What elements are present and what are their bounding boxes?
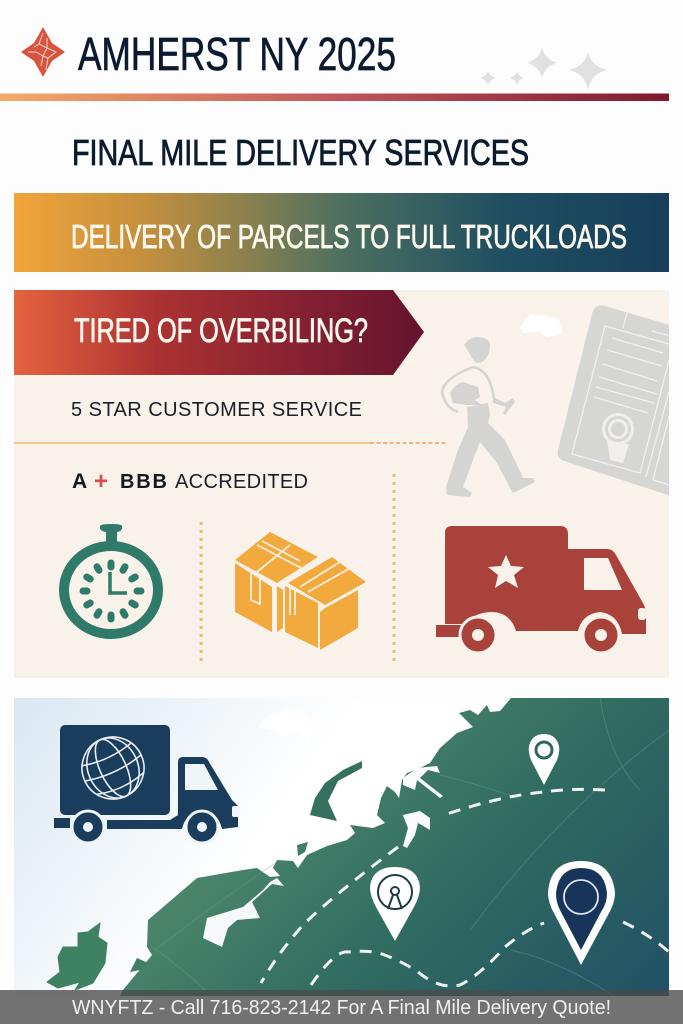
pin: large — [548, 861, 615, 965]
text: accreditation: + — [94, 468, 108, 495]
text: accreditation: A — [72, 470, 87, 493]
icon: parcels — [235, 532, 366, 650]
island west — [47, 923, 107, 990]
island north — [310, 761, 362, 821]
panel: services — [14, 290, 680, 678]
text: 5 star: 5 STAR CUSTOMER SERVICE — [71, 399, 362, 421]
icon: stopwatch — [64, 524, 158, 634]
header rule — [0, 94, 669, 101]
footer bar: WNYFTZ - Call 716-823-2142 For A Final Mile Delivery Quote! — [72, 997, 611, 1019]
subtitle: FINAL MILE DELIVERY SERVICES — [72, 132, 529, 173]
text: accreditation: BBB — [120, 471, 167, 493]
arrow banner: TIRED OF OVERBILING? — [74, 312, 368, 350]
decorative stars — [480, 48, 607, 90]
banner — [14, 193, 669, 272]
land mass — [118, 698, 669, 1000]
icon: globe truck — [54, 725, 240, 843]
text: accreditation: ACCREDITED — [175, 471, 308, 493]
illustration: cloud — [522, 316, 560, 335]
pin: medium — [370, 867, 420, 941]
map grid — [150, 698, 669, 1000]
route dashes — [261, 789, 669, 986]
divider — [14, 442, 446, 444]
footer bar — [0, 990, 683, 1024]
illustration: walking person — [442, 337, 535, 497]
title: AMHERST NY 2025 — [78, 28, 396, 80]
arrow banner — [14, 290, 424, 375]
illustration: document tablet — [558, 306, 669, 496]
icon: red truck — [436, 526, 646, 653]
fjords — [398, 766, 443, 848]
small islets — [130, 842, 308, 972]
logo: red diamond star — [21, 27, 65, 77]
text: accreditation — [72, 468, 308, 495]
pin: small — [529, 734, 559, 785]
sea inlet — [203, 878, 284, 947]
cloud — [258, 713, 278, 728]
panel: map — [14, 698, 669, 1000]
